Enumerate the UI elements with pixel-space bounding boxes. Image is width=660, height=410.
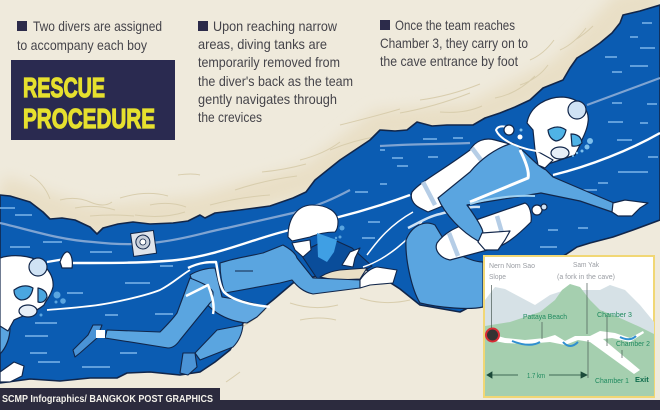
umbilical lines: [363, 212, 423, 267]
credit tab: [0, 388, 220, 410]
diver three tank strap: [470, 150, 528, 202]
diver three valve: [532, 204, 547, 215]
diver three legs: [406, 223, 483, 308]
diver three chest tank band: [449, 216, 504, 256]
label: Chamber 2: Chamber 2: [616, 339, 650, 348]
label: Nern Nom Sao: Nern Nom Sao: [489, 263, 535, 270]
title: rescue procedure: PROCEDURE: [23, 103, 155, 134]
green mountain: [485, 284, 654, 396]
diver three pointing hand: [478, 231, 510, 250]
label: 1.7 km: 1.7 km: [527, 371, 545, 380]
diver two torso and arm: [220, 245, 360, 294]
diver one regulator: [19, 305, 37, 317]
diver two near hand: [360, 267, 397, 288]
diver one valve: [0, 362, 24, 382]
bubbles: [518, 128, 593, 157]
credit tab: SCMP Infographics/ BANGKOK POST GRAPHICS: [2, 394, 213, 405]
diver three chest tank: [436, 203, 531, 260]
depth guide line: [0, 78, 660, 244]
safety line to harness: [47, 270, 190, 310]
label: Slope: Slope: [489, 274, 506, 281]
text block: two divers: to accompany each boy: [17, 37, 147, 53]
diver two far foot: [180, 353, 197, 375]
diver two far leg: [195, 325, 243, 360]
diver two chest shadow: [300, 238, 372, 280]
text block: narrow areas: Upon reaching narrow: [213, 18, 338, 34]
diver two hips: [190, 268, 267, 323]
diver one mask: [14, 286, 47, 302]
distance arrow: [487, 372, 587, 378]
icon: plaque marker: [131, 230, 157, 256]
diver three helmet: [527, 97, 588, 165]
diver two far hand: [342, 248, 360, 267]
diver three mask: [548, 127, 582, 146]
diver three back tank: [411, 139, 510, 212]
label lines: [492, 283, 622, 378]
red blockage marker: [486, 328, 499, 342]
diver two: [73, 205, 397, 375]
diver one: [0, 256, 53, 382]
diver two foot: [73, 325, 102, 357]
diver three lamp: [568, 101, 586, 119]
diver three harness: [408, 207, 480, 228]
text block: two divers: [17, 18, 162, 53]
rock ledge under hand: [320, 268, 367, 280]
diver two mask: [317, 233, 337, 262]
label: Exit: Exit: [635, 375, 649, 384]
diver three neck: [535, 150, 553, 168]
icon: carabiner: [60, 252, 72, 268]
text block: narrow areas: [198, 18, 353, 125]
diver three regulator: [551, 147, 569, 159]
diver two helmet: [288, 205, 338, 241]
diver two back crease: [235, 270, 253, 272]
cave channel: [487, 331, 644, 374]
diver two sock: [96, 330, 105, 338]
title: rescue procedure: [11, 60, 175, 140]
text block: two divers: Two divers are assigned: [33, 18, 162, 34]
label: Sam Yak: Sam Yak: [573, 262, 599, 269]
label: a fork in the cave: (a fork in the cave): [557, 274, 615, 281]
diver two near leg: [105, 278, 213, 348]
text block: chamber 3: the cave entrance by foot: [380, 53, 518, 69]
text block: narrow areas: the crevices: [198, 109, 262, 125]
diver three: [406, 97, 648, 308]
inset map panel: [484, 256, 654, 397]
distant mountains: [485, 285, 654, 335]
text block: narrow areas: gently navigates through: [198, 91, 337, 107]
label: Chamber 1: Chamber 1: [595, 376, 629, 385]
text block: narrow areas: areas, diving tanks are: [198, 36, 327, 52]
text block: chamber 3: Once the team reaches: [395, 17, 515, 33]
bubbles: [40, 226, 344, 316]
text block: narrow areas: the diver's back as the team: [198, 73, 353, 89]
diver one helmet: [0, 256, 53, 331]
flooded sections: [512, 336, 636, 346]
text block: narrow areas: temporarily removed from: [198, 54, 340, 70]
label: Chamber 3: Chamber 3: [597, 310, 632, 319]
diver three lower strap: [470, 196, 535, 204]
diver three hose bulb: [504, 125, 514, 135]
diver one body: [0, 322, 10, 354]
guide rope: [47, 133, 660, 263]
label: Pattaya Beach: Pattaya Beach: [523, 312, 567, 321]
diver three torso and arm: [438, 143, 614, 241]
diver one lamp: [29, 258, 47, 276]
diver two neck: [292, 240, 311, 257]
bottom bar: [0, 400, 660, 410]
diver three tank bands: [423, 148, 481, 205]
diver three air hose: [496, 126, 545, 152]
diver two harness: [186, 262, 270, 314]
diver three reaching hand: [612, 200, 648, 216]
text block: chamber 3: Chamber 3, they carry on to: [380, 35, 528, 51]
text block: chamber 3: [380, 17, 528, 69]
title: rescue procedure: RESCUE: [23, 72, 105, 103]
